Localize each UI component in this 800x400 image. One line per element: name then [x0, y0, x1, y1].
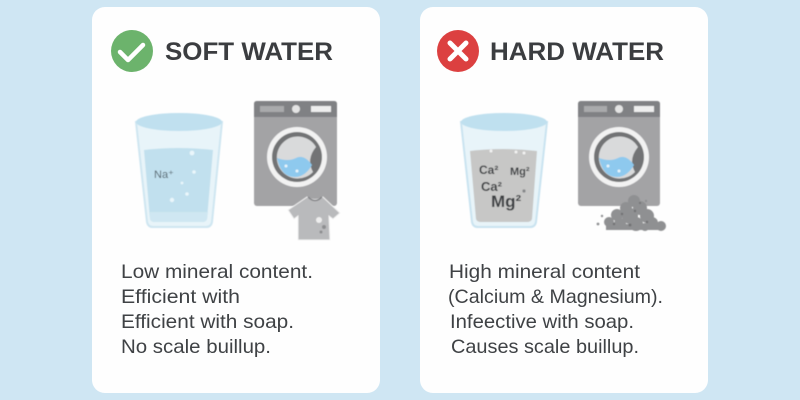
text: hard water points: [448, 261, 663, 358]
heading: soft water: SOFT WATER: [165, 38, 333, 66]
text: soft water points: Low mineral content.: [121, 261, 313, 283]
text: hard water points: Infeective with soap.: [450, 311, 634, 333]
text: soft water points: Efficient with: [121, 286, 240, 308]
icon: scale pile: [597, 195, 666, 231]
text: soft water points: [121, 261, 313, 358]
text: soft water points: No scale buillup.: [121, 336, 271, 358]
icon: green check: [111, 30, 153, 72]
icon: glass of hard water: Ca²: [479, 163, 498, 177]
icon: red cross: [437, 30, 479, 72]
panel: hard water: [420, 7, 708, 393]
text: soft water points: Efficient with soap.: [121, 311, 294, 333]
icon: glass of hard water: [461, 113, 547, 227]
icon: glass of soft water: Na⁺: [154, 169, 174, 181]
heading: hard water: HARD WATER: [490, 38, 664, 66]
panel: soft water: [92, 7, 380, 393]
icon: glass of soft water: [136, 113, 222, 227]
text: hard water points: Causes scale buillup.: [451, 336, 639, 358]
icon: t-shirt: [288, 197, 340, 240]
icon: glass of hard water: Mg²: [510, 166, 530, 178]
icon: glass of hard water: Ca²: [481, 179, 503, 194]
icon: glass of hard water: Mg²: [491, 192, 522, 211]
icon: washing machine: [254, 101, 337, 206]
text: hard water points: High mineral content: [449, 261, 641, 283]
text: hard water points: (Calcium & Magnesium).: [448, 286, 663, 308]
icon: washing machine: [578, 101, 660, 206]
